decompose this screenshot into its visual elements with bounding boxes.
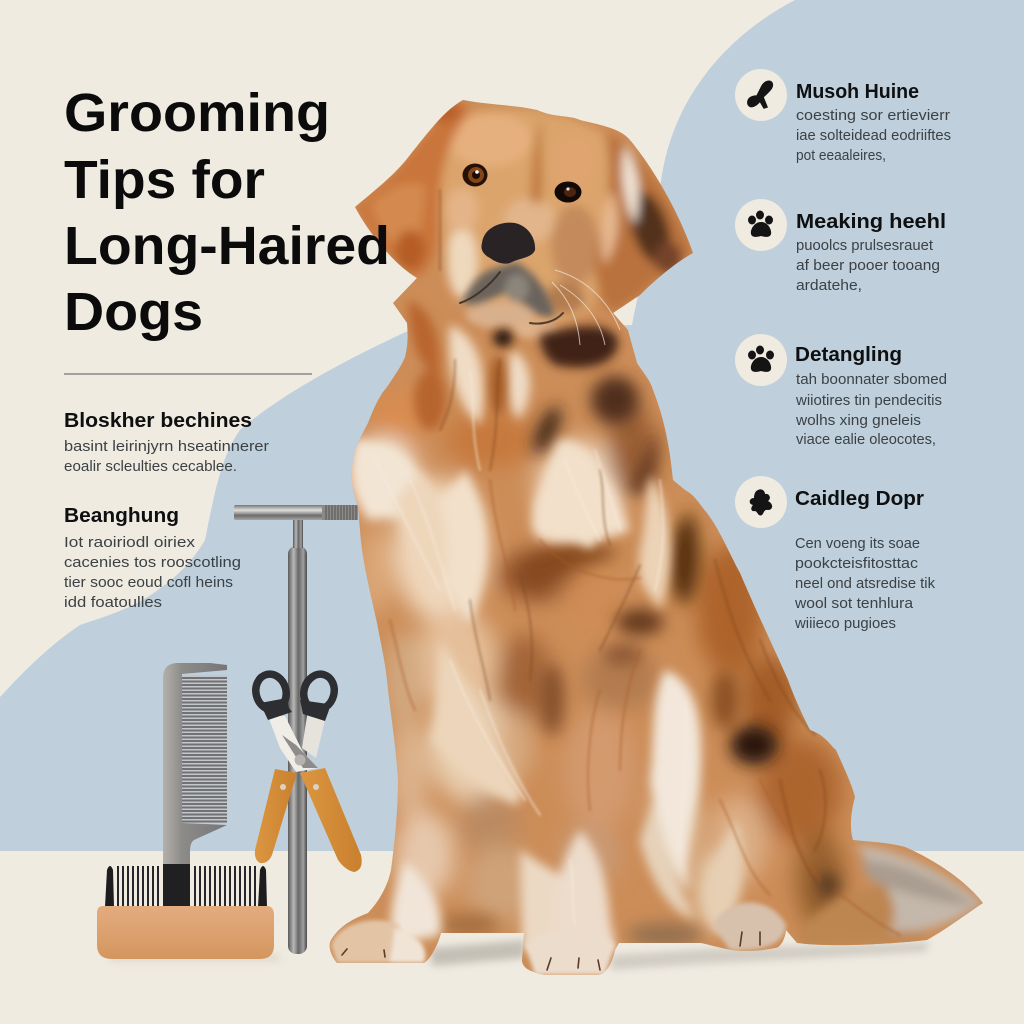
dark under-chin and neck ruff xyxy=(408,300,618,430)
grooming tool: wooden slicker brush xyxy=(97,864,274,959)
grooming tool: scissors with wooden handles xyxy=(252,671,362,872)
left cheek xyxy=(447,226,477,298)
grooming tool: metal comb xyxy=(163,663,227,870)
right tip: meaking heehl: Meaking heehl xyxy=(796,211,946,233)
icon: paw blob xyxy=(735,476,787,528)
left tip: bloskher bechines: basint leirinjyrn hseatinnerer xyxy=(64,439,269,455)
title: Grooming xyxy=(64,83,330,143)
right tip: detangling: wiiotires tin pendecitis xyxy=(795,393,942,409)
right tip: meaking heehl: af beer pooer tooang xyxy=(796,258,940,274)
right tip: detangling: Detangling xyxy=(795,344,902,366)
right tip: meaking heehl xyxy=(735,199,946,294)
right ear xyxy=(595,132,693,313)
fur strokes: light xyxy=(399,402,665,863)
left tip: beanghung: tier sooc eoud cofl heins xyxy=(64,575,233,591)
right tip: caidleg dopr: pookcteisfitosttac xyxy=(795,556,918,572)
right tip: caidleg dopr: neel ond atsredise tik xyxy=(795,576,936,592)
left tip: bloskher bechines xyxy=(64,410,269,475)
icon: paw xyxy=(735,334,787,386)
dog nose xyxy=(481,223,535,264)
title: Dogs xyxy=(64,282,203,342)
right tip: caidleg dopr: wool sot tenhlura xyxy=(794,596,914,612)
left tip: beanghung: idd foatoulles xyxy=(64,595,162,611)
left tip: beanghung xyxy=(64,505,241,611)
fur strokes: dark xyxy=(440,190,825,880)
right tip: caidleg dopr: wiiieco pugioes xyxy=(794,616,896,632)
icon: ribbon xyxy=(735,69,787,121)
right tip: caidleg dopr xyxy=(735,476,936,632)
forehead xyxy=(448,114,532,166)
icon: paw xyxy=(735,199,787,251)
dog paws xyxy=(331,902,786,975)
dog mouth xyxy=(460,272,563,324)
broad coat colour masses xyxy=(351,391,844,930)
title xyxy=(64,83,390,342)
right tip: caidleg dopr: Cen voeng its soae xyxy=(795,536,920,552)
dark coat patches xyxy=(440,376,838,947)
fur strokes: orange xyxy=(390,480,900,935)
dog eye right xyxy=(554,182,582,202)
right tip: musoh huine: coesting sor ertievierr xyxy=(796,108,950,124)
right tip: musoh huine: Musoh Huine xyxy=(796,81,919,103)
floor xyxy=(0,851,1024,1024)
right tip: detangling: viace ealie oleocotes, xyxy=(796,432,936,448)
floor shadow xyxy=(110,940,930,970)
left tip: bloskher bechines: eoalir scleulties cecablee. xyxy=(64,459,237,475)
title divider xyxy=(64,374,312,375)
right tip: musoh huine: iae solteidead eodriiftes xyxy=(796,128,951,144)
dog eye left xyxy=(462,164,488,186)
grooming tool: t-bar rake xyxy=(234,505,358,954)
left ear xyxy=(355,100,470,278)
dog face details xyxy=(460,164,620,345)
right tip: detangling: tah boonnater sbomed xyxy=(796,372,947,388)
right tip: musoh huine: pot eeaaleires, xyxy=(796,148,886,164)
title: Tips for xyxy=(64,150,265,210)
dog illustration xyxy=(320,90,1000,990)
right tip: caidleg dopr: Caidleg Dopr xyxy=(795,488,924,510)
title: Long-Haired xyxy=(64,216,390,276)
right tip: detangling xyxy=(735,334,947,448)
right tip: detangling: wolhs xing gneleis xyxy=(795,413,921,429)
right cheek xyxy=(551,205,599,285)
left tip: bloskher bechines: Bloskher bechines xyxy=(64,410,252,432)
head base xyxy=(355,100,693,330)
right tip: meaking heehl: puoolcs prulsesrauet xyxy=(796,238,933,254)
left tip: beanghung: Beanghung xyxy=(64,505,179,527)
right tip: meaking heehl: ardatehe, xyxy=(796,278,862,294)
forehead stripe xyxy=(530,118,542,205)
whiskers xyxy=(552,270,620,345)
cream fur tufts xyxy=(353,325,743,950)
right tip: musoh huine xyxy=(735,69,951,164)
muzzle xyxy=(462,262,559,338)
toe marks xyxy=(342,932,760,970)
tail and rear fur xyxy=(800,845,983,946)
left tip: beanghung: cacenies tos rooscotling xyxy=(64,555,241,571)
left tip: beanghung: Iot raoiriodl oiriex xyxy=(64,535,196,551)
